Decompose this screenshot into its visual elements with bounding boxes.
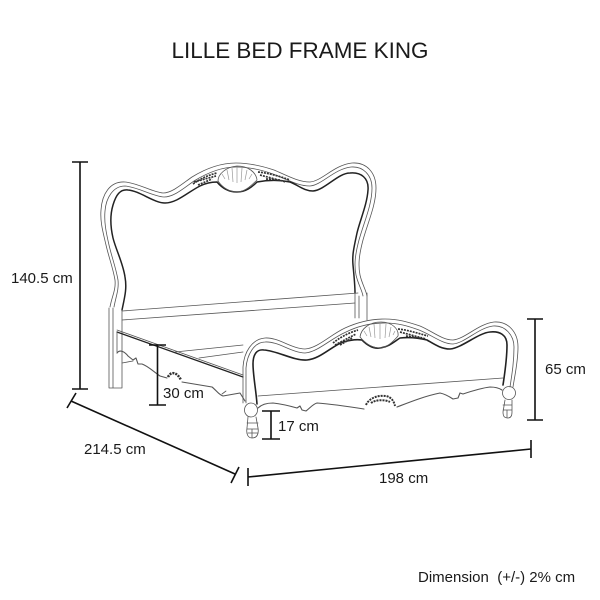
dimension: height 140.5 cm bbox=[11, 162, 88, 389]
headboard carving bbox=[193, 166, 290, 192]
footboard carving bbox=[333, 322, 428, 348]
left front leg bbox=[244, 403, 258, 438]
dimension: 30 cm bbox=[149, 345, 204, 405]
dimension: 65 cm bbox=[527, 319, 586, 420]
dimension: 65 cm: 65 cm bbox=[545, 361, 586, 378]
dimension: 198 cm bbox=[248, 440, 531, 487]
dimension: 17 cm: 17 cm bbox=[278, 418, 319, 435]
note: dimension tolerance: Dimension (+/-) 2% cm bbox=[418, 569, 575, 586]
footboard lower rail bbox=[258, 378, 503, 411]
dimension: height 140.5 cm: 140.5 cm bbox=[11, 270, 73, 287]
illustration: bed frame bbox=[101, 163, 518, 438]
side rail bbox=[117, 330, 245, 401]
dimension: 214.5 cm: 214.5 cm bbox=[84, 441, 146, 458]
title: LILLE BED FRAME KING bbox=[172, 38, 428, 63]
dimension: 198 cm: 198 cm bbox=[379, 470, 428, 487]
headboard rails and posts bbox=[109, 293, 367, 388]
footboard bbox=[243, 319, 518, 438]
dimension: 214.5 cm bbox=[67, 393, 239, 483]
right front leg bbox=[502, 386, 516, 418]
dimension: 17 cm bbox=[262, 411, 319, 439]
headboard bbox=[101, 163, 376, 388]
dimension: 30 cm: 30 cm bbox=[163, 385, 204, 402]
